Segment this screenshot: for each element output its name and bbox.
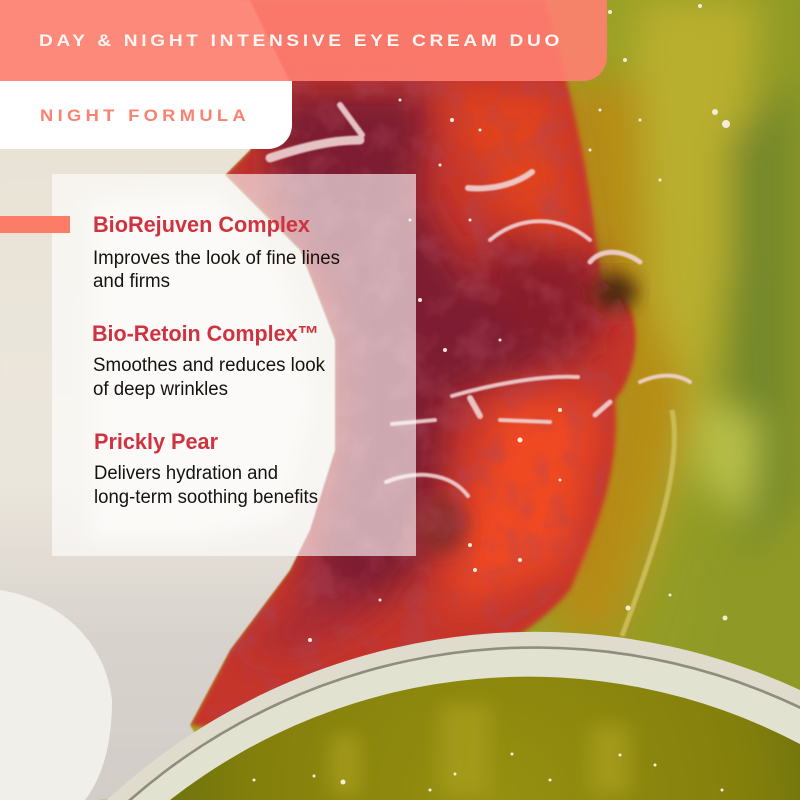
bubbles xyxy=(308,4,730,642)
ingredient: Prickly Pear xyxy=(94,429,318,508)
ingredient: Bio-Retoin Complex: of deep wrinkles xyxy=(93,379,228,400)
jar cream contents xyxy=(170,677,800,800)
header bar xyxy=(0,0,607,81)
oil strand xyxy=(622,410,674,636)
ingredient: BioRejuven Complex: Improves the look of fine lines xyxy=(93,248,340,269)
subheading: night formula: NIGHT FORMULA xyxy=(40,106,250,125)
jar groove xyxy=(128,646,800,800)
green swirl tones xyxy=(540,0,795,640)
jar inner ring xyxy=(132,649,800,800)
white tab xyxy=(0,81,292,149)
jar outer rim xyxy=(107,632,800,800)
fruit mottling xyxy=(205,0,629,730)
title: DAY & NIGHT INTENSIVE EYE CREAM DUO xyxy=(39,31,563,50)
ingredient: Prickly Pear: Delivers hydration and xyxy=(94,463,278,484)
ingredient: BioRejuven Complex xyxy=(93,212,340,292)
red fruit mass xyxy=(190,0,637,740)
ingredient: Bio-Retoin Complex: Smoothes and reduces look xyxy=(93,355,325,376)
cream foam xyxy=(0,0,335,800)
ingredient: Prickly Pear: long-term soothing benefits xyxy=(94,487,318,508)
glossy highlights xyxy=(270,105,690,496)
ingredient: BioRejuven Complex: and firms xyxy=(93,271,170,292)
ingredient: BioRejuven Complex: BioRejuven Complex xyxy=(93,212,311,237)
ingredient: Bio-Retoin Complex xyxy=(92,321,325,400)
ingredient: Bio-Retoin Complex: Bio-Retoin Complex™ xyxy=(92,321,319,346)
jar xyxy=(107,632,800,800)
panel: ingredients xyxy=(0,174,416,556)
ingredient: Prickly Pear: Prickly Pear xyxy=(94,429,218,454)
accent bar xyxy=(0,216,70,233)
